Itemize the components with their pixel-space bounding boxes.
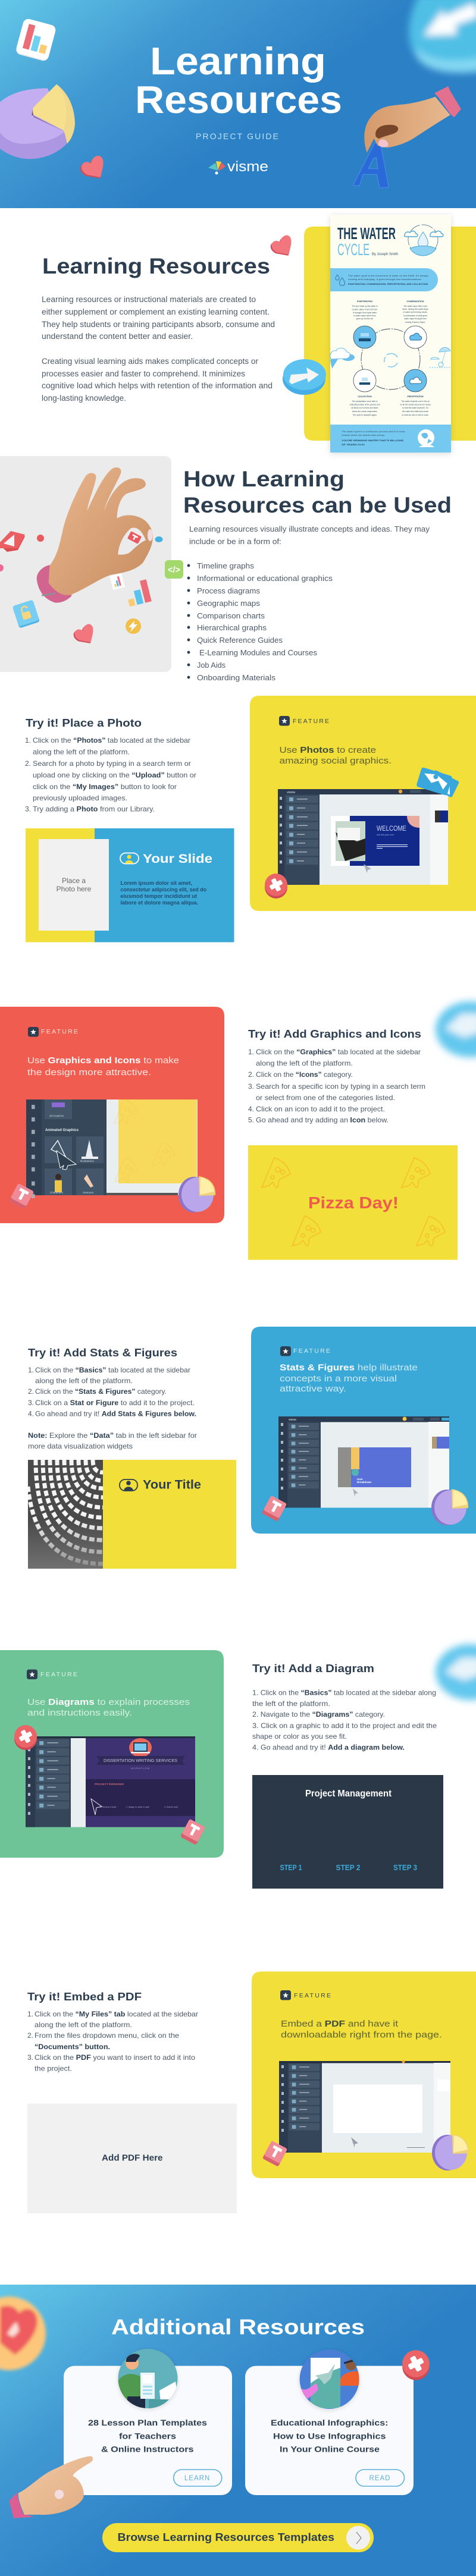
steps list: along the left of the platform.: [35, 2021, 132, 2029]
bullet list: Onboarding Materials: [197, 673, 276, 682]
card: pizza day: [248, 1145, 458, 1260]
placeholder: add pdf: [27, 2104, 237, 2213]
card title: In Your Online Course: [280, 2445, 380, 2454]
icon: plus coin: [265, 874, 287, 899]
steps list: Click on the “Basics” tab located at the sidebar: [35, 1366, 190, 1374]
step: precipitation text: to hold the water anymore. So: [402, 407, 428, 409]
feature text: Use Diagrams to explain processes: [27, 1697, 190, 1707]
card title: Pizza Day!: [308, 1193, 399, 1212]
step: precipitation text: so all the clouds become too heavy: [400, 403, 431, 406]
icon: mini chart card: [109, 573, 125, 590]
panel: hand illustration: [0, 456, 183, 672]
editor screenshot: graphics: Animated Graphics: [45, 1128, 79, 1132]
card title: How to Use Infographics: [273, 2431, 386, 2440]
step: evaporation text: The sun heats up the water in: [352, 305, 378, 307]
step labels: [280, 1863, 417, 1872]
heading: How Learning: [183, 467, 345, 491]
poster footer band: ceases since our planet was young.: [342, 434, 385, 436]
step: evaporation text: It changes from liquid water: [353, 312, 377, 314]
section: stats and figures: [28, 1327, 476, 1569]
steps list: 3.: [28, 1399, 34, 1407]
slide thumbnail: welcome: Add title goes here: [377, 834, 394, 836]
steps list: 1. Click on the “Basics” tab located at the sidebar along: [252, 1689, 436, 1697]
bullet list: [187, 561, 333, 682]
icon: blue coin: [155, 536, 163, 542]
editor screenshot: stats: visme: [289, 1418, 296, 1422]
feature badge: [279, 716, 329, 725]
step: evaporation text: to water vapor which then: [353, 315, 376, 317]
poster callout pill: [330, 268, 438, 291]
slide body text: labore et dolore magna aliqua.: [120, 900, 198, 906]
steps list: or select from one of the categories listed.: [256, 1094, 395, 1102]
text block: intro paragraphs: Creating visual learning aids makes complicated concepts or: [42, 357, 258, 366]
steps list: Go ahead and try adding an Icon below.: [256, 1116, 389, 1124]
feature badge: FEATURE: [41, 1028, 78, 1035]
diagram: cycle ring: [353, 326, 427, 392]
text block: intro: [189, 524, 430, 546]
icon: person pill: [120, 853, 139, 863]
icon: T tile: [127, 531, 142, 544]
illustration: teacher: [117, 2349, 178, 2411]
poster callout pill: The water cycle is the movement of water on the Earth. It's always: [348, 275, 428, 277]
slide template: your slide: [26, 828, 234, 942]
bullet list: E-Learning Modules and Courses: [199, 648, 318, 657]
steps list: [25, 736, 196, 813]
text block: intro paragraphs: Learning resources or instructional materials are created to: [42, 295, 256, 304]
feature badge: [28, 1027, 78, 1037]
bullet list: Quick Reference Guides: [197, 636, 283, 645]
step: collection text: all flows out to rivers and lakes: [352, 407, 378, 409]
steps list: 3.: [27, 2053, 33, 2062]
section: how learning resources can be used: [0, 456, 452, 682]
editor screenshot: pdf: [279, 2060, 450, 2153]
steps list: Try adding a Photo from our Library.: [33, 805, 155, 813]
banner: WORKFLOW: [131, 1767, 150, 1770]
note: more data visualization widgets: [28, 1442, 133, 1450]
slide thumbnail: welcome: [331, 811, 448, 866]
section: graphics and icons: [0, 1001, 476, 1260]
editor screenshot: diagram: [26, 1736, 195, 1827]
button: browse templates: [102, 2523, 374, 2552]
step: condensation text: CONDENSATION: [407, 300, 424, 303]
section: place a photo: [25, 696, 476, 942]
step: evaporation text: oceans, lakes, rivers and soil.: [352, 308, 378, 310]
feature badge: FEATURE: [40, 1671, 77, 1678]
panel: photos feature: [250, 696, 476, 911]
heading: Additional Resources: [111, 2314, 365, 2339]
steps list: 5.: [248, 1116, 254, 1124]
panel: stats feature: [251, 1327, 476, 1534]
steps list: Click on the “Stats & Figures” category.: [35, 1387, 167, 1396]
icon: mini pie: [432, 2134, 469, 2170]
poster footer band: YOU'RE DRINKING WATER THAT'S BILLIONS: [342, 439, 404, 442]
bullet list: Hierarchical graphs: [197, 623, 267, 632]
slide thumbnail: welcome: WELCOME: [377, 824, 406, 833]
text block: intro paragraphs: long-lasting knowledge.: [42, 394, 126, 403]
steps list: 3. Click on a graphic to add it to the project and edit the: [252, 1721, 437, 1730]
heading: Try it! Add a Diagram: [252, 1663, 374, 1675]
steps list: 4.: [28, 1409, 34, 1418]
step: collection text: collecting bodies of the ground and: [349, 403, 380, 406]
section: learning resources intro: [42, 215, 476, 453]
note: [28, 1431, 197, 1450]
hero banner: [0, 0, 476, 208]
button: read: READ: [369, 2475, 390, 2482]
steps list: upload one by clicking on the “Upload” button or: [33, 771, 196, 779]
icon: blurred arrow disc: [436, 1001, 476, 1057]
feature text: concepts in a more visual: [280, 1374, 397, 1384]
card title: & Online Instructors: [101, 2445, 194, 2454]
steps list: Click on a Stat or Figure to add it to the project.: [35, 1399, 195, 1407]
subtitle: PROJECT GUIDE: [196, 131, 278, 141]
step: evaporation text: goes up into the air.: [356, 318, 374, 320]
heading: Resources can be Used: [183, 493, 452, 517]
logo: visme: visme: [227, 159, 268, 175]
step: condensation text: down, turning into small drops: [402, 308, 428, 310]
steps list: 4. Go ahead and try it! Add a diagram below.: [252, 1743, 405, 1752]
icon: ok hand: [37, 467, 153, 603]
icon: heart: [271, 235, 292, 256]
heading: Try it! Add Stats & Figures: [28, 1347, 177, 1359]
feature text: and instructions easily.: [27, 1708, 132, 1718]
feature badge: FEATURE: [293, 718, 329, 725]
icon: T block: [262, 2141, 287, 2167]
heading: Try it! Place a Photo: [26, 717, 142, 729]
section: embed a pdf: [27, 1972, 476, 2213]
feature badge: FEATURE: [294, 1992, 331, 1999]
step: condensation text: [402, 300, 428, 323]
step: precipitation text: PRECIPITATION: [407, 395, 424, 398]
slide thumbnail: [338, 1437, 449, 1497]
icon: pink shape: [0, 564, 4, 571]
title: [135, 39, 342, 121]
feature badge: [27, 1670, 77, 1679]
banner: [96, 1756, 185, 1770]
text block: intro paragraphs: cognitive load which helps with retention of the information and: [42, 381, 273, 390]
feature text: [280, 1363, 418, 1394]
step: precipitation text: to earth as rain or hail or snow.: [402, 414, 429, 416]
button: browse templates: Browse Learning Resources Templates: [118, 2531, 334, 2543]
step: condensation text: turning it back to liquid.: [405, 321, 425, 323]
text block: intro paragraphs: processes easier and faster to comprehend. It minimizes: [42, 369, 245, 378]
steps list: click on the “My Images” button to look for: [33, 783, 177, 791]
card: educational infographics: [245, 2349, 414, 2495]
icon: lightning coin: [126, 618, 141, 634]
step: precipitation text: The water droplets cool in the air: [401, 400, 430, 403]
slide body text: [120, 880, 206, 906]
step: collection text: COLLECTION: [358, 395, 372, 398]
section: diagrams: [0, 1644, 476, 1889]
photo placeholder: Place a: [62, 877, 86, 885]
steps list: 1.: [25, 736, 31, 744]
poster footer band: The water cycle is a continuous process and it is never: [342, 431, 406, 433]
steps list: Click on the PDF you want to insert to add it into: [35, 2053, 195, 2062]
poster callout pill: moving and changing. It goes through four transformations:: [348, 278, 422, 281]
text block: intro: Learning resources visually illustrate concepts and ideas. They may: [189, 524, 430, 533]
feature text: [27, 1055, 179, 1077]
icon: cursor: [364, 864, 371, 873]
card: lesson plan templates: [64, 2349, 232, 2495]
slide body text: Lorem ipsum dolor sit amet,: [120, 880, 192, 886]
editor screenshot: graphics: Characters: [50, 1191, 64, 1194]
feature badge: [280, 1990, 331, 2000]
icon: mini pie: [431, 1489, 468, 1525]
steps list: Search for a photo by typing in a search term or: [33, 759, 191, 768]
steps list: 2.: [28, 1387, 34, 1396]
step: collection text: The precipitation soon falls to: [352, 400, 378, 403]
banner: DISSERTATION WRITING SERVICES: [104, 1758, 177, 1763]
feature text: [280, 745, 392, 766]
feature text: Embed a PDF and have it: [281, 2019, 399, 2029]
text block: intro paragraphs: They help students or training participants absorb, consume and: [42, 320, 275, 329]
slide template: your title: [28, 1460, 236, 1569]
card title: 28 Lesson Plan Templates: [88, 2418, 207, 2427]
steps list: Go ahead and try it! Add Stats & Figures below.: [35, 1409, 196, 1418]
step: condensation text: Condensation is what gives: [403, 315, 427, 317]
editor screenshot: photos: visme: [287, 791, 295, 794]
steps list: [252, 1689, 437, 1752]
steps list: Search for a specific icon by typing in a search term: [256, 1082, 425, 1091]
poster title: By Joseph Smith: [372, 253, 398, 256]
icon: plus coin: [14, 1725, 37, 1750]
steps list: From the files dropdown menu, click on the: [35, 2031, 179, 2040]
bullet list: Geographic maps: [197, 599, 261, 608]
steps list: Click on the “My Files” tab located at the sidebar: [35, 2010, 198, 2018]
feature badge: [280, 1346, 330, 1356]
editor screenshot: stats: [278, 1416, 449, 1508]
steps list: shape or color as you see fit.: [252, 1732, 347, 1741]
feature text: [281, 2019, 442, 2040]
photo placeholder: Photo here: [57, 885, 92, 893]
feature text: attractive way.: [280, 1384, 346, 1394]
heading: Try it! Embed a PDF: [27, 1991, 142, 2003]
steps list: 1.: [248, 1048, 254, 1056]
feature badge: FEATURE: [293, 1347, 330, 1355]
feature text: Use Graphics and Icons to make: [27, 1055, 179, 1066]
icon: blurred heart: [0, 2297, 46, 2370]
editor screenshot: diagram: PROJECT MANAGER: [95, 1783, 124, 1785]
icon: T block: [180, 1819, 205, 1845]
panel: diagrams feature: [0, 1650, 224, 1858]
icon: photos stack: [416, 767, 459, 798]
steps list: 2.: [248, 1070, 254, 1079]
panel: pdf feature: [252, 1972, 476, 2178]
poster footer band: OF YEARS OLD!: [342, 444, 365, 446]
poster title: [337, 224, 398, 259]
step: collection text: where the ocean evaporates.: [352, 410, 377, 413]
steps list: [248, 1048, 425, 1124]
pizza slice icons: [262, 1158, 445, 1246]
photo: architecture: [28, 1460, 103, 1569]
feature text: the design more attractive.: [27, 1067, 151, 1077]
icon: beach umbrella: [430, 347, 451, 367]
heading: Learning Resources: [42, 254, 270, 278]
editor screenshot: graphics: 3d Graphics: [49, 1114, 64, 1117]
poster title: CYCLE: [337, 240, 369, 259]
slide thumbnail: Breakdown: [357, 1481, 372, 1484]
feature text: downloadable right from the page.: [281, 2030, 442, 2040]
text block: intro paragraphs: [42, 295, 275, 403]
card: project management diagram: [252, 1775, 443, 1889]
icon: pointing hand: [9, 2456, 93, 2518]
steps list: 1.: [28, 1366, 34, 1374]
heading: Try it! Add Graphics and Icons: [248, 1028, 421, 1040]
steps list: Click on the “Graphics” tab located at the sidebar: [256, 1048, 421, 1056]
card title: [88, 2418, 207, 2454]
steps list: 2. Navigate to the “Diagrams” category.: [252, 1710, 385, 1719]
steps list: Click on an icon to add it to the project.: [256, 1105, 385, 1113]
card title: Educational Infographics:: [271, 2418, 388, 2427]
icon: person: [120, 1479, 137, 1491]
editor screenshot: diagram: 3. Submit draft: [164, 1806, 178, 1808]
heading: [183, 467, 452, 517]
step: precipitation text: [400, 395, 431, 416]
poster: the water cycle: [330, 215, 451, 453]
steps list: “Documents” button.: [35, 2043, 110, 2051]
steps list: previously uploaded images.: [33, 794, 127, 802]
panel: graphics feature: [0, 1007, 224, 1223]
icon: lock tile: [12, 599, 40, 629]
illustration: dinosaur poster: [299, 2349, 363, 2411]
icon: code tile: </>: [168, 565, 180, 575]
card title: Project Management: [305, 1789, 392, 1799]
icon: blurred arrow disc: [409, 0, 476, 73]
icon: code tile: [165, 560, 183, 579]
editor screenshot: graphics: [26, 1099, 198, 1198]
button: learn: [174, 2470, 222, 2486]
icon: small coin: [37, 535, 44, 542]
icon: storm cloud: [330, 348, 355, 369]
step: evaporation text: EVAPORATION: [357, 300, 372, 303]
feature text: [27, 1697, 190, 1718]
title: Learning: [150, 39, 326, 83]
feature text: Use Photos to create: [280, 745, 376, 755]
slide thumbnail: User: [357, 1478, 363, 1481]
icon: hand holding letter A: [353, 86, 461, 188]
steps list: 3.: [25, 805, 31, 813]
icon: bar chart: [124, 579, 152, 607]
text block: intro: include or be in a form of:: [189, 537, 281, 546]
icon: water drop globe: [405, 225, 443, 256]
slide body text: eiusmod tempor incididunt ut: [120, 893, 197, 899]
step: precipitation text: the water then falls back down: [402, 410, 428, 413]
bullet list: Process diagrams: [197, 586, 261, 595]
step labels: STEP 1: [280, 1863, 302, 1872]
bullet list: Informational or educational graphics: [197, 574, 333, 583]
steps list: Click on the “Photos” tab located at the sidebar: [33, 736, 190, 744]
photo placeholder: [39, 839, 109, 931]
editor screenshot: photos: [278, 789, 448, 885]
icon: bar chart tile: [15, 18, 57, 62]
poster footer band: [330, 425, 451, 453]
steps list: 3.: [248, 1082, 254, 1091]
icon: laptop tag: [129, 1738, 152, 1757]
icon: heart: [80, 156, 104, 178]
steps list: 4.: [248, 1105, 254, 1113]
step: condensation text: The water vapor then cools: [403, 305, 427, 307]
card title: [271, 2418, 388, 2454]
step: condensation text: water vapor its liquid form: [404, 318, 427, 320]
steps list: 1.: [27, 2010, 33, 2018]
section: additional resources: [0, 2285, 476, 2576]
slide body text: consectetur adipiscing elit, sed do: [120, 887, 206, 893]
steps list: [28, 1366, 196, 1418]
button: read: [356, 2470, 405, 2486]
icon: play tile: [0, 531, 25, 552]
placeholder: add pdf: Add PDF Here: [102, 2153, 163, 2163]
step: condensation text: of water and forming clouds.: [403, 311, 428, 313]
steps list: along the left of the platform.: [35, 1377, 133, 1385]
editor screenshot: diagram: 2. Assign to writer & staff: [126, 1806, 149, 1808]
panel: yellow backing: [304, 227, 476, 441]
text block: intro paragraphs: understand the content better and easier.: [42, 332, 193, 341]
icon: T block: [262, 1496, 287, 1522]
logo: visme: [208, 159, 268, 175]
editor screenshot: graphics: Gestures: [83, 1191, 94, 1194]
steps list: the left of the platform.: [252, 1699, 330, 1708]
step labels: STEP 3: [393, 1863, 417, 1872]
card title: for Teachers: [119, 2431, 176, 2440]
step: collection text: [349, 395, 380, 416]
poster title: THE WATER: [337, 224, 396, 243]
editor screenshot: graphics: Illustrations: [80, 1160, 95, 1163]
note: Note: Explore the “Data” tab in the left sidebar for: [28, 1431, 197, 1440]
steps list: 2.: [25, 759, 31, 768]
icon: 3D pie chart: [0, 84, 75, 159]
editor screenshot: diagram: 1. Review of draft: [100, 1806, 116, 1808]
feature text: Stats & Figures help illustrate: [280, 1363, 418, 1373]
feature text: amazing social graphics.: [280, 756, 392, 766]
step: evaporation text: [352, 300, 378, 320]
icon: T block: [9, 1183, 34, 1210]
bullet list: Comparison charts: [197, 611, 265, 620]
slide title: Your Slide: [143, 852, 212, 866]
steps list: [27, 2010, 198, 2073]
bullet list: Timeline graphs: [197, 561, 255, 570]
slide title: Your Title: [143, 1478, 201, 1491]
step: collection text: The cycle is repeated again.: [352, 414, 377, 416]
title: Resources: [135, 78, 342, 121]
icon: mini pie: [178, 1176, 215, 1212]
step labels: STEP 2: [336, 1863, 361, 1872]
button: learn: LEARN: [184, 2475, 210, 2482]
steps list: along the left of the platform.: [256, 1059, 353, 1067]
steps list: along the left of the platform.: [33, 748, 130, 756]
steps list: Click on the “Icons” category.: [256, 1070, 353, 1079]
icon: chevron: [346, 2526, 370, 2550]
bullet list: Job Aids: [197, 661, 226, 670]
text block: intro paragraphs: either supplement or complement an existing learning content.: [42, 307, 270, 316]
icon: blurred arrow disc: [436, 1644, 476, 1700]
steps list: the project.: [35, 2065, 72, 2073]
icon: arrow coin: [283, 359, 326, 395]
icon: heart: [74, 624, 93, 643]
icon: plus coin: [402, 2350, 430, 2380]
poster callout pill: EVAPORATION, CONDENSATION, PRECIPITATION, AND COLLECTION.: [348, 283, 428, 285]
steps list: 2.: [27, 2031, 33, 2040]
